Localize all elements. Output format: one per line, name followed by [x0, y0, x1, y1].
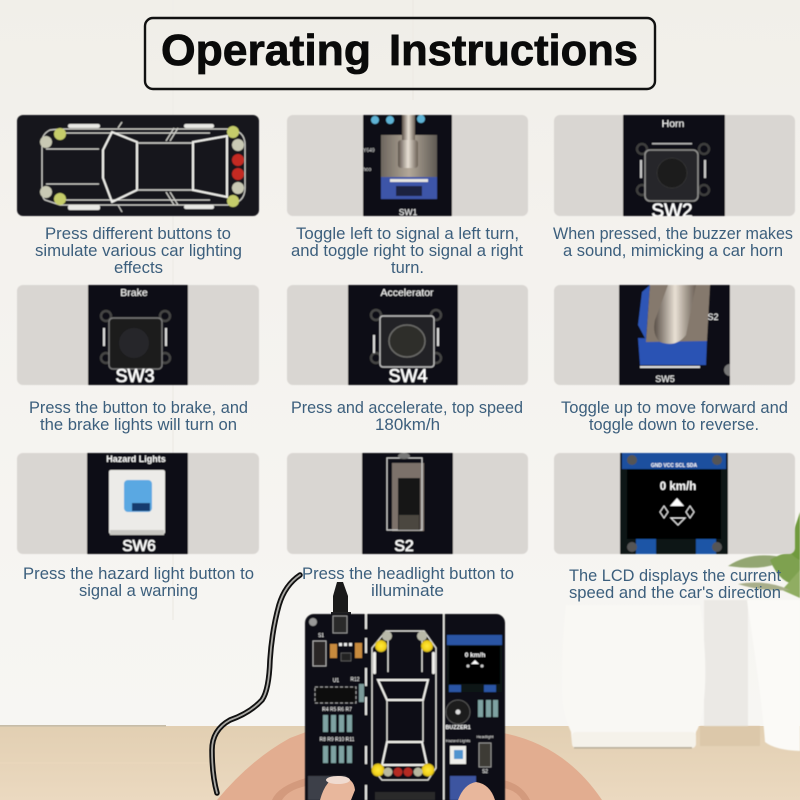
board LEDs — [372, 631, 434, 776]
panel: SW3 brake: SW3 — [115, 366, 155, 386]
title box: Instructions — [389, 26, 638, 75]
panel: SW5 direction toggle — [554, 285, 795, 385]
circuit board — [305, 614, 505, 800]
panel: LCD — [554, 453, 795, 554]
power section — [309, 616, 364, 743]
panel: SW1 turn toggle: Y649 — [363, 148, 375, 154]
caption: car lighting: Press different buttons to — [45, 225, 231, 243]
vase — [562, 600, 760, 749]
panel: SW5 direction toggle: S2 — [707, 312, 719, 322]
caption: SW2 — [553, 225, 793, 260]
panel: S2 headlight: S2 — [394, 538, 414, 555]
hazard button — [446, 738, 470, 764]
caption: SW3: Press the button to brake, and — [29, 399, 248, 417]
panel: car lighting — [17, 115, 259, 216]
left hand — [217, 732, 306, 800]
panel: S2 headlight — [287, 453, 528, 555]
panel: SW1 turn toggle: hoo — [363, 167, 372, 173]
caption: SW1: and toggle right to signal a right — [291, 242, 523, 260]
caption: SW3 — [29, 399, 248, 434]
buzzer: BUZZER1 — [445, 725, 471, 731]
caption: SW1 — [291, 225, 523, 277]
caption: SW3: the brake lights will turn on — [40, 416, 237, 434]
caption: LCD: speed and the car's direction — [569, 584, 781, 602]
power section: R8 R9 R10 R11 — [320, 737, 355, 743]
panel: LCD: 0 km/h — [660, 481, 696, 493]
power section: U1 — [333, 678, 339, 684]
caption: S2: illuminate — [371, 582, 444, 600]
headlight switch: Headlight — [477, 734, 494, 739]
panel: SW4 accelerator: SW4 — [388, 366, 428, 386]
side markers — [373, 652, 435, 674]
road dividers — [365, 614, 445, 800]
board car outline — [372, 631, 436, 780]
panel: SW3 brake: Brake — [120, 287, 148, 299]
title box — [145, 18, 655, 89]
LEDs — [40, 126, 244, 207]
power section: R12 — [350, 677, 360, 683]
panel: SW6 hazard: SW6 — [122, 538, 156, 555]
caption: SW4: Press and accelerate, top speed — [291, 399, 523, 417]
panel: SW4 accelerator: Accelerator — [380, 287, 434, 299]
left thumb — [320, 776, 355, 800]
caption: SW6 — [23, 565, 254, 600]
power section: R4 R5 R6 R7 — [322, 707, 352, 713]
caption: LCD: The LCD displays the current — [569, 567, 781, 585]
caption: SW5: Toggle up to move forward and — [561, 399, 788, 417]
board OLED: 0 km/h — [465, 652, 485, 659]
power cable — [212, 575, 300, 793]
resistors — [323, 700, 498, 763]
panel: LCD: GND VCC SCL SDA — [651, 463, 698, 469]
panel: SW2 horn: Horn — [662, 118, 685, 130]
lower switches — [308, 776, 476, 800]
caption: S2: Press the headlight button to — [302, 565, 514, 583]
caption: car lighting — [35, 225, 242, 277]
headlight switch: S2 — [482, 769, 488, 775]
power section: S1 — [318, 633, 324, 639]
caption: SW2: When pressed, the buzzer makes — [553, 225, 793, 243]
title box: Operating — [161, 26, 371, 75]
side markers — [68, 124, 214, 210]
plant leaves — [728, 512, 800, 598]
caption: SW1: Toggle left to signal a left turn, — [296, 225, 519, 243]
caption: SW6: Press the hazard light button to — [23, 565, 254, 583]
panel: SW6 hazard — [17, 453, 259, 555]
plant pot — [747, 600, 800, 751]
caption: S2 — [302, 565, 514, 600]
panel: SW2 horn: SW2 — [651, 201, 693, 222]
caption: SW5: toggle down to reverse. — [589, 416, 759, 434]
USB plug — [331, 582, 351, 632]
caption: SW4: 180km/h — [375, 416, 440, 434]
right thumb — [458, 782, 495, 800]
board OLED — [447, 635, 502, 692]
caption: car lighting: simulate various car lighting — [35, 242, 242, 260]
hazard button: Hazard Lights — [446, 738, 470, 743]
panel: SW3 brake — [17, 285, 259, 386]
caption: car lighting: effects — [114, 259, 163, 277]
panel: SW5 direction toggle: SW5 — [655, 374, 675, 384]
caption: SW6: signal a warning — [79, 582, 198, 600]
buzzer — [445, 700, 471, 731]
right hand — [503, 733, 602, 800]
panel: SW1 turn toggle: SW1 — [399, 207, 417, 217]
panel: SW6 hazard: Hazard Lights — [106, 454, 166, 464]
caption: SW5 — [561, 399, 788, 434]
caption: LCD — [569, 567, 781, 602]
headlight switch — [477, 734, 494, 775]
car outline drawing — [42, 122, 245, 212]
panel: SW2 horn — [554, 115, 795, 222]
panel: SW4 accelerator — [287, 285, 528, 386]
panel: SW1 turn toggle — [287, 115, 528, 217]
caption: SW1: turn. — [391, 259, 424, 277]
caption: SW2: a sound, mimicking a car horn — [563, 242, 783, 260]
caption: SW4 — [291, 399, 523, 434]
